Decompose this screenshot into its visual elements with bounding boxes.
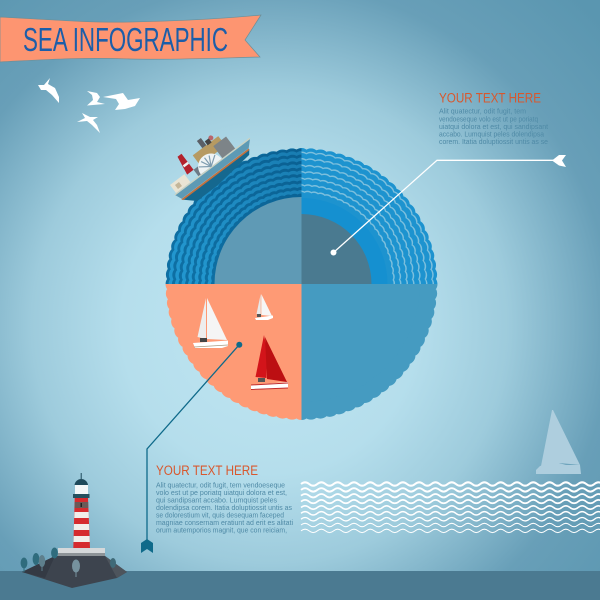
text block: bottom: Alit quatectur, odit fugit, tem vendoeseque bbox=[156, 481, 285, 490]
banner title bbox=[0, 15, 261, 62]
sea band bbox=[0, 571, 600, 600]
icon: lighthouse on island bbox=[21, 473, 127, 588]
text block: top right: Alit quatectur, odit fugit, tem bbox=[439, 107, 526, 116]
text block: top right: YOUR TEXT HERE bbox=[439, 91, 541, 106]
text block: bottom: se dolorestium vit, quis desequam faceped bbox=[156, 511, 284, 520]
text block: top right: accabo. Lumquist peles dolendipsa bbox=[439, 130, 545, 139]
text block: bottom: orum autemporios magnit, que con reiciam, bbox=[156, 526, 287, 535]
icon: red sailboat bbox=[251, 335, 288, 390]
text block: bottom: YOUR TEXT HERE bbox=[156, 463, 258, 478]
white wave lines bbox=[301, 482, 600, 533]
text block: top right: uiatqui dolora et est, qui sandipsant bbox=[439, 122, 548, 131]
text block: top right: corem. Itatia doluptiossit untis as se bbox=[439, 137, 548, 146]
icon: seagulls bbox=[38, 78, 140, 133]
text block: bottom: dolendipsa corem. Itatia doluptiossit untis as bbox=[156, 503, 292, 512]
text block: top right bbox=[439, 91, 548, 146]
text block: top right: vendoeseque volo est ut pe poriatq bbox=[439, 114, 538, 123]
text block: bottom: qui sandipsant accabo. Lumquist peles bbox=[156, 496, 277, 505]
panel: wave quadrant left bbox=[166, 148, 302, 284]
icon: white sailboat large bbox=[193, 298, 228, 348]
panel: salmon quadrant bbox=[166, 284, 302, 420]
icon: paddle steamer bbox=[157, 114, 261, 209]
icon: white sailboat small bbox=[255, 294, 273, 320]
banner title: SEA INFOGRAPHIC bbox=[23, 21, 228, 58]
text block: bottom bbox=[156, 463, 293, 535]
text block: bottom: volo est ut pe poriatq uiatqui dolora et est, bbox=[156, 488, 287, 497]
icon: faded sailboat silhouette bbox=[536, 410, 581, 474]
white connector with arrow bbox=[330, 155, 566, 256]
text block: bottom: magniae consernam eratiunt ad erit es alitati bbox=[156, 518, 293, 527]
teal connector with arrow bbox=[141, 342, 242, 553]
panel: blue quadrant bbox=[302, 284, 438, 420]
panel: wave quadrant right bbox=[302, 148, 438, 284]
